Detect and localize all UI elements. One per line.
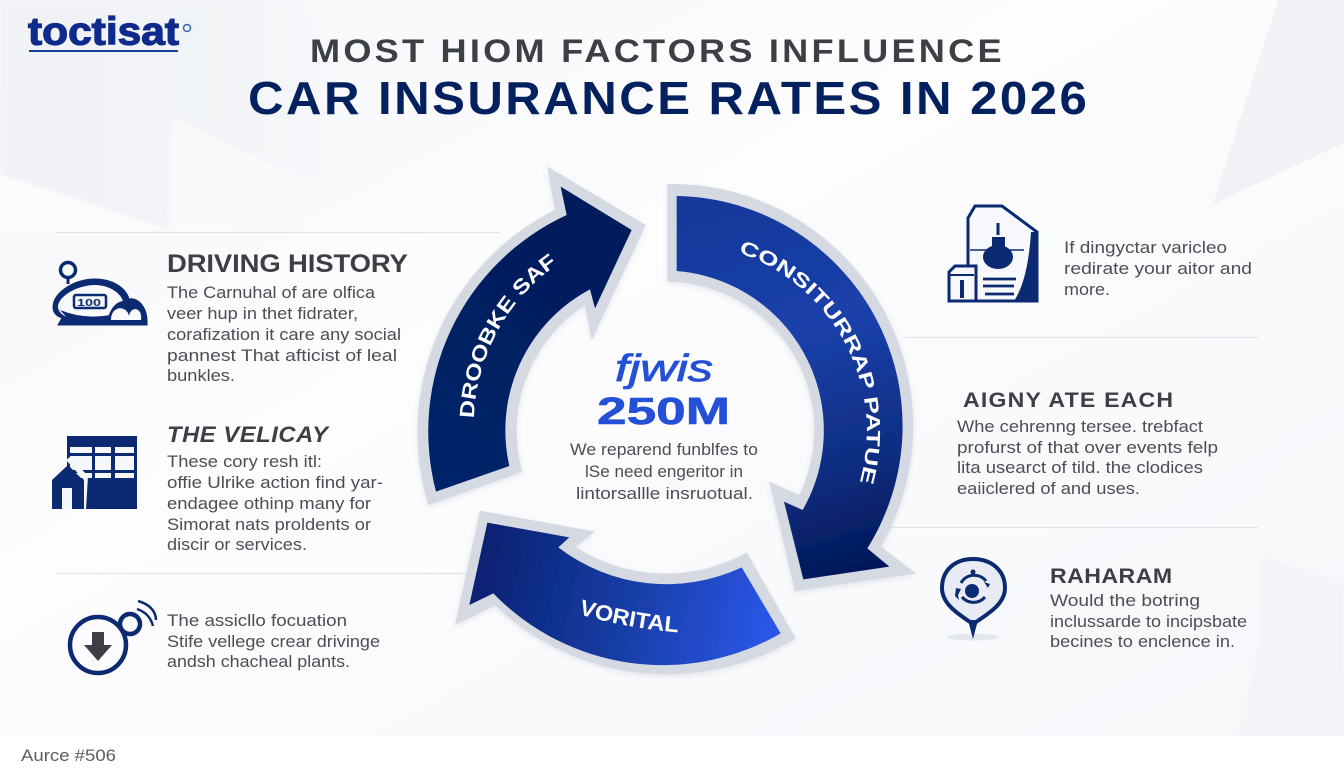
panel: assicllo focuation <box>70 601 380 673</box>
text block: bunkles. <box>167 366 235 385</box>
icon: document <box>949 206 1037 301</box>
text block <box>1064 238 1252 299</box>
icon: car gauge <box>53 262 147 325</box>
icon: location pin <box>942 559 1005 640</box>
heading: RAHARAM <box>1050 564 1172 588</box>
text block <box>1050 591 1247 651</box>
icon: building <box>52 436 137 509</box>
arrow: consumer rate <box>666 184 916 594</box>
logo: toctisat <box>28 10 179 54</box>
source footer: Aurce #506 <box>21 746 116 765</box>
text block <box>167 452 383 554</box>
text block: discir or services. <box>167 535 307 554</box>
title <box>248 34 1087 125</box>
text block: becines to enclence in. <box>1050 632 1235 651</box>
panel: raharam <box>942 559 1247 651</box>
text block: lita usearct of tild. the clodices <box>957 458 1203 477</box>
text block: Simorat nats proldents or <box>167 515 371 534</box>
panel: aigny ate each <box>957 388 1218 498</box>
text block <box>957 417 1218 498</box>
title: MOST HIOM FACTORS INFLUENCE <box>310 34 1002 69</box>
text block: Stife vellege crear drivinge <box>167 632 380 651</box>
icon: car gauge: 100 <box>77 298 102 309</box>
text block <box>167 283 401 385</box>
text block <box>167 611 380 671</box>
text block: offie Ulrike action find yar- <box>167 473 383 492</box>
panel: driving history <box>53 249 408 385</box>
center stat: 250M <box>597 391 730 433</box>
center stat: lSe need engeritor in <box>585 462 743 481</box>
text block: inclussarde to incipsbate <box>1050 612 1247 631</box>
arrow label: CONSITURRAP PATUE <box>741 242 880 484</box>
arrow: vortal <box>455 510 796 678</box>
text block: The Carnuhal of are olfica <box>167 283 376 302</box>
text block: endagee othinp many for <box>167 494 371 513</box>
text block: veer hup in thet fidrater, <box>167 304 358 323</box>
text block: pannest That afticist of leal <box>167 346 397 365</box>
text block: andsh chacheal plants. <box>167 652 350 671</box>
center stat: We reparend funblfes to <box>570 440 758 459</box>
dividers <box>56 232 1258 574</box>
center stat: lintorsallle insruotual. <box>576 484 753 503</box>
heading: THE VELICAY <box>167 422 330 447</box>
text block: profurst of that over events felp <box>957 438 1218 457</box>
text block: redirate your aitor and <box>1064 259 1252 278</box>
panel: dingyctar varicleo <box>949 206 1252 301</box>
panel: the velicay <box>52 422 383 554</box>
center stat: fjwis <box>615 348 713 390</box>
icon: gauge with arrow <box>70 601 156 673</box>
heading: AIGNY ATE EACH <box>963 388 1173 412</box>
heading: DRIVING HISTORY <box>167 249 408 278</box>
arrow: driving safety <box>416 166 646 507</box>
text block: more. <box>1064 280 1110 299</box>
text block: These cory resh itl: <box>167 452 322 471</box>
text block: Would the botring <box>1050 591 1200 610</box>
title: CAR INSURANCE RATES IN 2026 <box>248 73 1087 125</box>
text block: Whe cehrenng tersee. trebfact <box>957 417 1203 436</box>
center stat <box>570 348 758 503</box>
text block: eaiiclered of and uses. <box>957 479 1140 498</box>
cycle diagram <box>416 166 952 678</box>
arrow label: VORITAL <box>582 600 678 632</box>
text block: If dingyctar varicleo <box>1064 238 1227 257</box>
text block: The assicllo focuation <box>167 611 347 630</box>
text block: corafization it care any social <box>167 325 401 344</box>
arrow label: DROOBKE SAF <box>460 253 554 417</box>
